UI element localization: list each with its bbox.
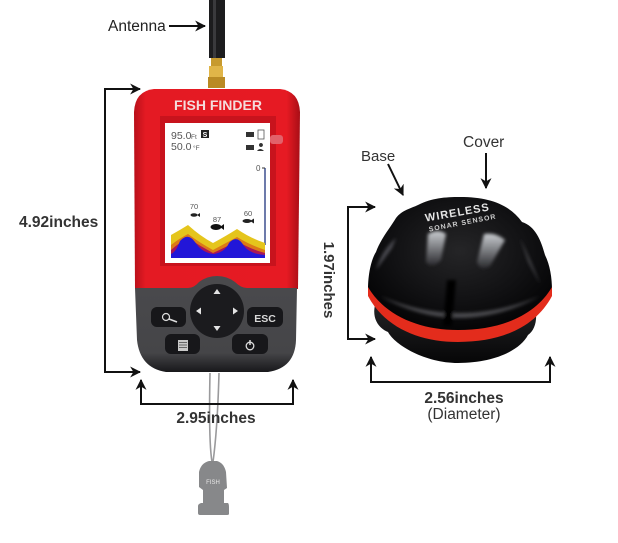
antenna label: Antenna: [108, 18, 166, 35]
depth scale: [256, 164, 265, 245]
fish marks: 70: [190, 202, 198, 211]
cover label: Cover: [463, 134, 504, 151]
height dimension: 4.92 inches: [19, 89, 140, 372]
sonar sensor: SONAR SENSOR: [428, 214, 497, 234]
device body: [134, 89, 300, 289]
lower grey panel: [135, 276, 297, 372]
sensor diameter dimension: 2.56 inches: 2.56inches: [424, 390, 504, 407]
sonar chart: [171, 225, 265, 258]
depth and temperature readout: 50.0: [171, 141, 192, 153]
depth and temperature readout: Ft: [191, 134, 197, 141]
sensor dome: [368, 197, 552, 332]
antenna label: [108, 18, 205, 35]
fish marks: [190, 202, 254, 230]
sensor height dimension: 1.97 inches: [320, 207, 375, 339]
base label: [361, 148, 403, 195]
fish marks: 60: [244, 209, 252, 218]
width dimension: 2.95 inches: [141, 380, 293, 427]
lanyard tag: [198, 461, 229, 515]
depth and temperature readout: S: [203, 132, 208, 139]
battery icons: [246, 130, 264, 151]
depth and temperature readout: °F: [193, 144, 200, 152]
lanyard tag: FISH: [206, 480, 220, 486]
ESC button: [247, 307, 283, 327]
ESC button: ESC: [254, 313, 276, 325]
menu button: [165, 334, 200, 354]
sensor base lobes: [374, 305, 536, 363]
cover label: [463, 134, 504, 188]
sensor print: WIRELESS: [424, 201, 491, 225]
power button: [232, 334, 268, 354]
sensor diameter dimension: 2.56 inches: [371, 357, 550, 423]
antenna: [208, 0, 225, 88]
screen: [165, 123, 270, 263]
depth and temperature readout: [171, 130, 209, 153]
fish marks: 87: [213, 215, 221, 224]
directional pad: [190, 284, 244, 338]
dome reflections: [376, 231, 540, 326]
width dimension: 2.95 inches: 2.95inches: [176, 410, 256, 427]
height dimension: 4.92 inches: 4.92inches: [19, 214, 98, 231]
fish finder device: [134, 89, 300, 372]
base label: Base: [361, 148, 395, 165]
red ring: [368, 287, 552, 342]
sonar sensor: [368, 197, 552, 363]
depth and temperature readout: 95.0: [171, 130, 192, 142]
title: FISH FINDER: [174, 97, 262, 113]
screen bezel: [160, 116, 276, 266]
sensor diameter dimension: 2.56 inches: (Diameter): [427, 406, 501, 423]
depth scale: 0: [256, 164, 261, 173]
lanyard strap: [210, 373, 219, 462]
zoom button: [151, 307, 186, 327]
sensor height dimension: 1.97 inches: 1.97inches: [320, 242, 337, 318]
